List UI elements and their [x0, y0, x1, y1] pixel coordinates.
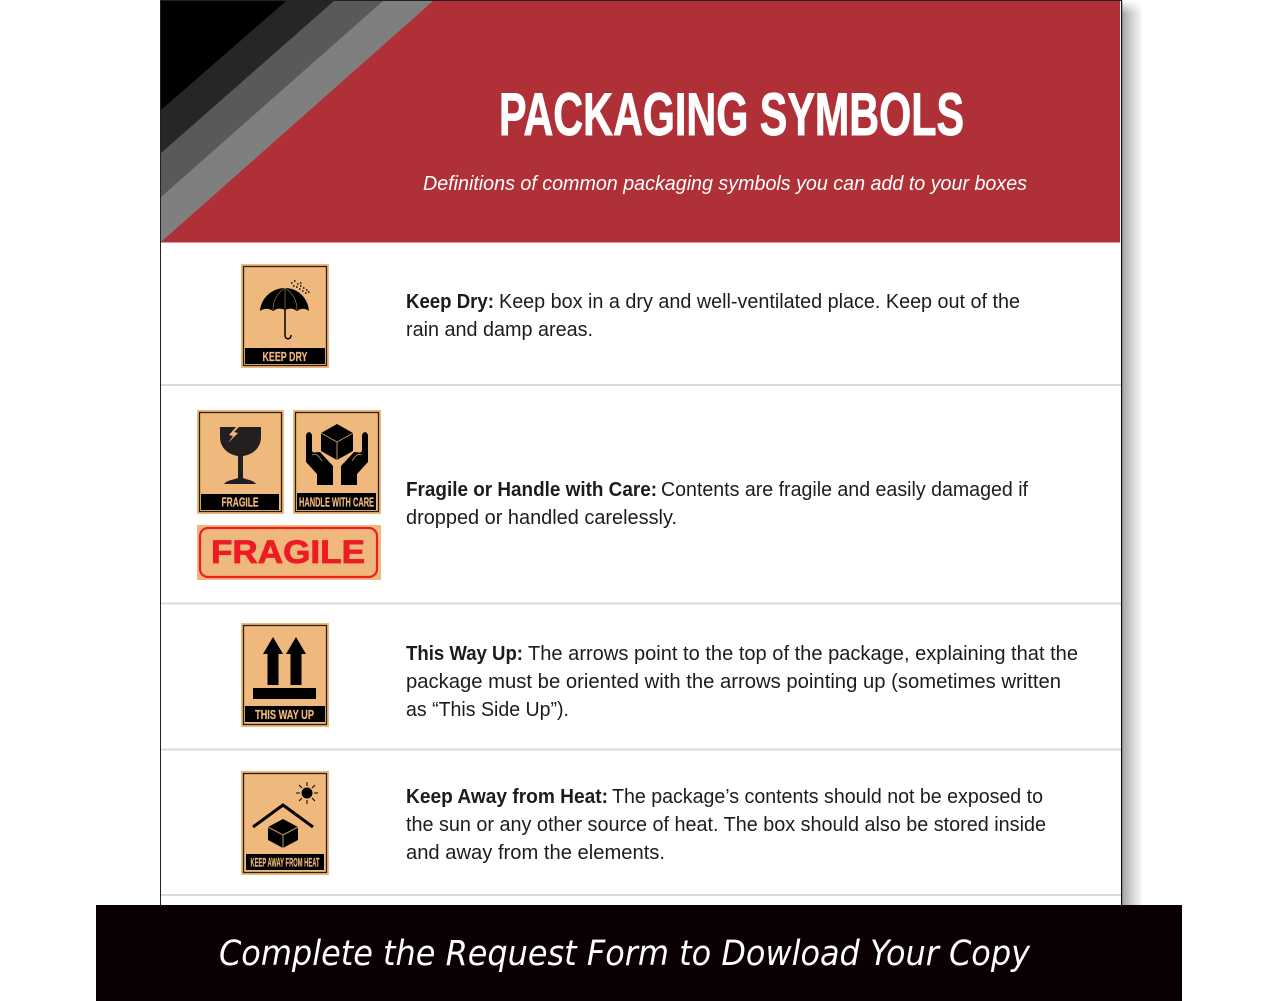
text: keep away from heat: and away from the elements.	[406, 842, 665, 864]
text: this way up: as “This Side Up”).	[406, 699, 569, 721]
icon: keep dry label	[241, 264, 329, 368]
text: this way up: The arrows point to the top of the package, explaining that the	[528, 643, 1078, 665]
text: fragile: Fragile or Handle with Care:	[406, 479, 657, 501]
text: keep dry	[406, 291, 1020, 341]
text: keep away from heat: Keep Away from Heat:	[406, 786, 608, 808]
icon: handle with care label	[293, 410, 381, 514]
text: keep dry: Keep Dry:	[406, 291, 494, 313]
text: keep dry: rain and damp areas.	[406, 319, 593, 341]
subtitle: Definitions of common packaging symbols you can add to your boxes	[423, 173, 1027, 195]
icon: fragile glass label	[197, 410, 284, 514]
icon: fragile glass label: FRAGILE	[222, 494, 259, 510]
text: keep away from heat: The package’s contents should not be exposed to	[612, 786, 1043, 808]
text: keep dry: Keep box in a dry and well-ventilated place. Keep out of the	[499, 291, 1020, 313]
text: fragile: Contents are fragile and easily damaged if	[661, 479, 1028, 501]
icon: handle with care label: HANDLE WITH CARE	[299, 494, 374, 510]
text: fragile: dropped or handled carelessly.	[406, 507, 677, 529]
icon: keep away from heat label: KEEP AWAY FROM HEAT	[250, 856, 320, 870]
page sheet with drop shadow	[160, 0, 1143, 905]
icon: keep dry label: KEEP DRY	[262, 349, 308, 364]
text: this way up	[406, 643, 1078, 721]
icon: this way up label: THIS WAY UP	[255, 707, 314, 722]
text: keep away from heat	[406, 786, 1046, 864]
text: this way up: This Way Up:	[406, 643, 523, 665]
text: this way up: package must be oriented with the arrows pointing up (sometimes written	[406, 671, 1061, 693]
title: PACKAGING SYMBOLS	[499, 81, 964, 148]
icon: keep away from heat label	[241, 771, 329, 875]
header banner	[161, 0, 1121, 242]
icon: red fragile stamp	[197, 525, 381, 580]
icon: red fragile stamp: FRAGILE	[211, 534, 365, 570]
footer call to action bar	[96, 905, 1182, 1001]
text: keep away from heat: the sun or any other source of heat. The box should also be stored inside	[406, 814, 1046, 836]
footer call to action bar: Complete the Request Form to Dowload Your Copy	[219, 934, 1031, 974]
icon: this way up label	[241, 623, 329, 727]
text: fragile	[406, 479, 1028, 529]
